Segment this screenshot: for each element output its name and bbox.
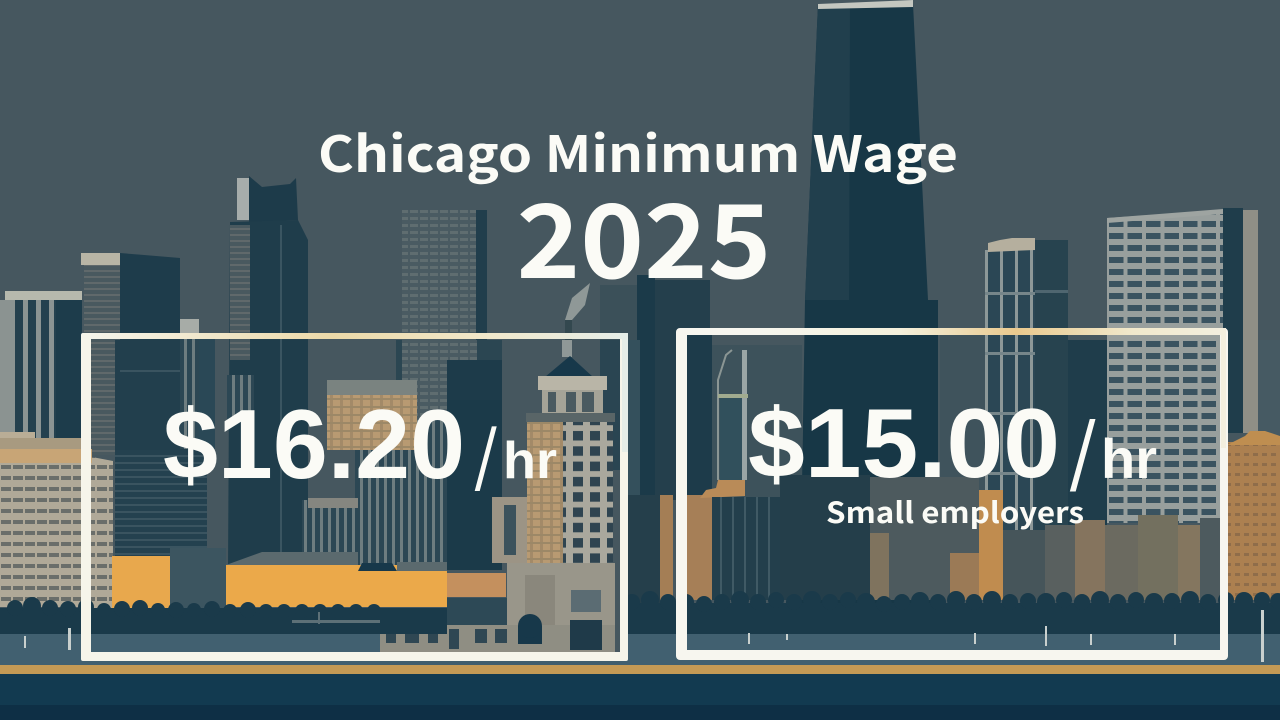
skyline: faceted tower (985, 238, 1107, 530)
skyline: grey mid tower (396, 210, 502, 570)
title: Chicago Minimum Wage (318, 115, 958, 187)
panel: standard wage (81, 333, 628, 661)
wage unit: per hour (1069, 393, 1157, 500)
ground stripes (0, 665, 1280, 720)
frame highlight: gold top and right edge (91, 333, 628, 452)
skyline: Willis-style tower (227, 176, 308, 570)
skyline: right low-rise row (660, 350, 1280, 600)
caption: small employers: Small employers (826, 490, 1084, 532)
wage unit: per hour (474, 403, 557, 499)
pier details (292, 612, 380, 624)
skyline: middle towers inside first panel (302, 380, 502, 570)
skyline: flame spire and dark centre towers (565, 275, 710, 605)
wage unit: per hour: / (474, 403, 498, 499)
skyline: right window tower (1107, 208, 1280, 523)
skyline: low orange buildings (112, 548, 507, 625)
skyline: central dark skyscraper (685, 0, 985, 605)
panel frame: small employer wage (676, 328, 1228, 660)
year: 2025 (516, 161, 772, 308)
tree line (0, 591, 1280, 634)
panel: small employer wage (676, 328, 1228, 660)
skyline: left office towers (0, 253, 215, 560)
wage unit: per hour: hr (1101, 427, 1157, 490)
wage unit: per hour: / (1069, 393, 1097, 500)
frame highlight: gold top and right edge (760, 328, 1226, 448)
skyline: ornate cream tower (380, 340, 615, 652)
waterfront band (0, 610, 1280, 665)
wage unit: per hour: hr (503, 432, 557, 490)
wage value: $15.00: $15.00 (748, 388, 1060, 498)
panel frame: standard wage (81, 333, 628, 661)
skyline: left foreground cream building (0, 432, 113, 608)
wage value: $16.20: $16.20 (163, 389, 465, 499)
